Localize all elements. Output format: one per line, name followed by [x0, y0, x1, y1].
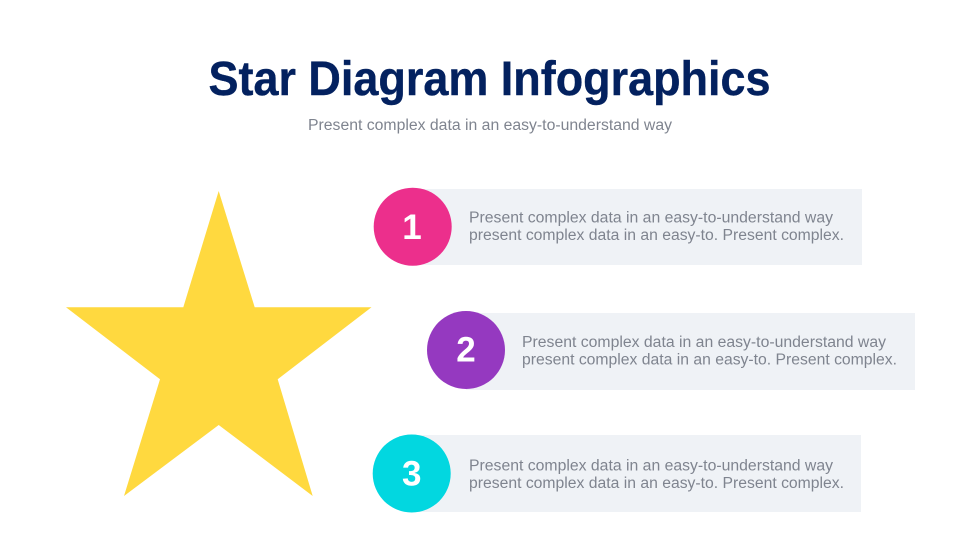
icon: purple number circle — [427, 311, 505, 389]
item 3 — [373, 434, 861, 512]
item 1 — [374, 188, 862, 266]
text block: item 1 — [469, 210, 844, 244]
text block: item 1: present complex data in an easy-to. Present complex. — [469, 227, 844, 244]
text block: item 3 — [469, 458, 844, 492]
item 2 — [427, 311, 915, 390]
text block: item 3: Present complex data in an easy-to-understand way — [469, 458, 833, 474]
title: Star Diagram Infographics — [208, 53, 770, 106]
panel: item 3 background — [411, 435, 861, 512]
text block: item 2: Present complex data in an easy-to-understand way — [522, 334, 886, 351]
number 1: 1 — [402, 208, 422, 247]
subtitle: Present complex data in an easy-to-understand way — [308, 117, 672, 134]
text block: item 2 — [522, 334, 897, 368]
icon: cyan number circle — [373, 434, 451, 512]
panel: item 2 background — [466, 313, 915, 390]
icon: pink number circle — [374, 188, 452, 266]
text block: item 1: Present complex data in an easy-to-understand way — [469, 210, 833, 226]
icon: yellow star — [66, 191, 372, 496]
number 3: 3 — [402, 454, 421, 494]
text block: item 2: present complex data in an easy-to. Present complex. — [522, 352, 897, 368]
number 2: 2 — [456, 330, 476, 370]
panel: item 1 background — [412, 189, 862, 265]
text block: item 3: present complex data in an easy-to. Present complex. — [469, 475, 844, 492]
